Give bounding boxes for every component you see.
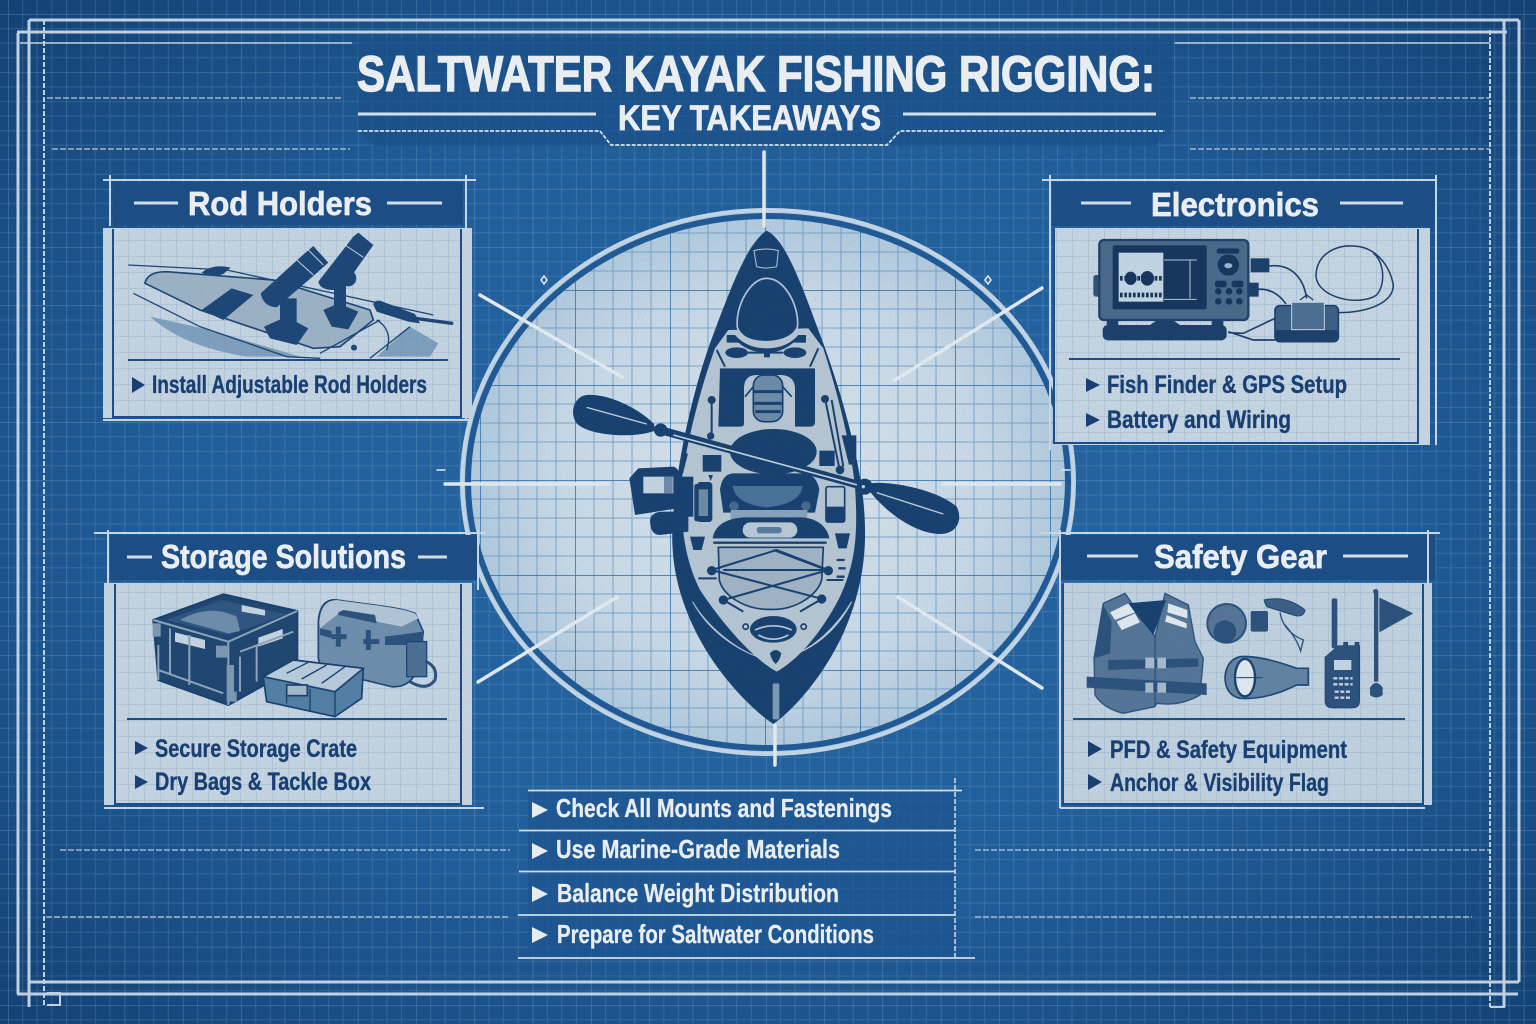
- subtitle: KEY TAKEAWAYS: [618, 99, 881, 138]
- checklist item: saltwater: Prepare for Saltwater Conditions: [557, 919, 874, 949]
- life vest: [1087, 593, 1207, 713]
- panel: safety gear: Anchor & Visibility Flag: [1110, 769, 1329, 797]
- checklist item: weight: Balance Weight Distribution: [557, 878, 839, 908]
- spokes from kayak to panels: [437, 152, 1070, 765]
- icon: rod holders on deck: [128, 233, 452, 358]
- panel: electronics: Fish Finder & GPS Setup: [1107, 371, 1347, 399]
- icon: fish finder and battery: [1093, 240, 1393, 342]
- fish finder: [629, 467, 711, 535]
- safety header: Safety Gear: [1154, 538, 1327, 575]
- panel: electronics: Battery and Wiring: [1107, 406, 1291, 434]
- panel: storage solutions: Dry Bags & Tackle Box: [155, 768, 371, 796]
- storage header: [110, 535, 478, 580]
- electronics header: Electronics: [1151, 186, 1319, 223]
- paddle: [573, 395, 959, 534]
- side rails: [712, 398, 843, 468]
- rod holders header: [113, 182, 463, 225]
- tank well with bungee: [713, 539, 827, 546]
- deck: [681, 328, 856, 672]
- kayak with paddle and fish finder: [573, 231, 959, 724]
- central disc with grid: [450, 200, 1090, 770]
- title block: [357, 38, 1172, 146]
- bow hatches: [737, 249, 798, 342]
- checklist item: materials: Use Marine-Grade Materials: [556, 834, 840, 864]
- panel: rod holders: Install Adjustable Rod Holders: [152, 371, 427, 399]
- panel: safety gear: [1040, 530, 1440, 808]
- stern hatch: [750, 616, 797, 643]
- panel: key checklist: [518, 778, 975, 958]
- console lower with oval: [713, 517, 829, 538]
- panel: rod holders: [103, 175, 476, 420]
- safety header: [1060, 535, 1435, 580]
- rod holders header: Rod Holders: [188, 185, 372, 222]
- console: [720, 473, 819, 513]
- seat: [730, 429, 817, 474]
- panel: safety gear: PFD & Safety Equipment: [1110, 736, 1348, 764]
- electronics header: [1052, 182, 1435, 226]
- front tray: [718, 368, 815, 427]
- hull: [672, 231, 865, 724]
- storage header: Storage Solutions: [161, 538, 406, 575]
- icon: crate, cooler, tackle box: [153, 594, 436, 717]
- panel: electronics: [1042, 175, 1436, 450]
- title: SALTWATER KAYAK FISHING RIGGING:: [357, 46, 1155, 102]
- checklist item: mounts: Check All Mounts and Fastenings: [556, 793, 892, 823]
- icon: vest, whistle, spotlight, radio, flag: [1087, 589, 1413, 713]
- panel: storage solutions: Secure Storage Crate: [155, 735, 357, 763]
- panel: storage solutions: [94, 530, 486, 808]
